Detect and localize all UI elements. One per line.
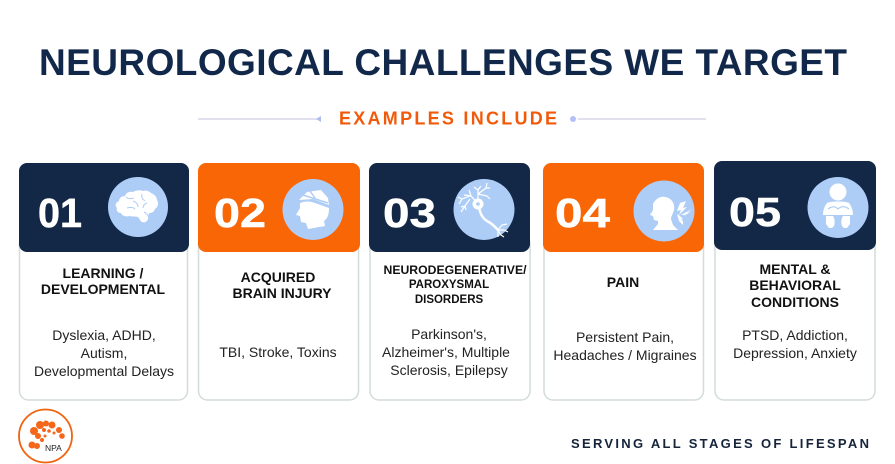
number 04: 04 <box>555 190 610 236</box>
heading: CONDITIONS <box>751 294 839 310</box>
heading: LEARNING / <box>63 265 144 281</box>
title: NEUROLOGICAL CHALLENGES WE TARGET <box>39 42 847 83</box>
heading: BEHAVIORAL <box>749 277 841 293</box>
number 01: 01 <box>38 190 82 236</box>
heading: DEVELOPMENTAL <box>41 281 166 297</box>
heading: NEURODEGENERATIVE/ <box>384 265 527 277</box>
icon: neuron <box>454 179 514 240</box>
heading: BRAIN INJURY <box>232 285 332 301</box>
body text: TBI, Stroke, Toxins <box>219 344 337 360</box>
logo: NPA <box>19 410 72 462</box>
icon: person hugging knees <box>808 177 868 238</box>
body text: PTSD, Addiction, <box>742 327 848 343</box>
body text: Dyslexia, ADHD, <box>52 327 156 343</box>
panel: card 1 learning / developmental <box>19 163 189 400</box>
subtitle with divider lines: EXAMPLES INCLUDE <box>339 108 557 128</box>
logo: NPA: NPA <box>45 443 62 453</box>
icon: brain <box>108 177 168 237</box>
body text: Developmental Delays <box>34 363 174 379</box>
body text: Autism, <box>81 345 127 361</box>
subtitle with divider lines <box>198 108 706 128</box>
body text: Headaches / Migraines <box>553 347 697 363</box>
body text: Parkinson's, <box>411 326 487 342</box>
heading: PAIN <box>607 274 639 290</box>
number 03: 03 <box>383 190 436 236</box>
panel: card 3 neurodegenerative <box>369 163 530 400</box>
body text: Persistent Pain, <box>576 329 674 345</box>
body text: Depression, Anxiety <box>733 345 857 361</box>
panel: card 5 mental and behavioral <box>714 161 876 400</box>
body text: Sclerosis, Epilepsy <box>390 362 508 378</box>
number 02: 02 <box>214 190 266 236</box>
body text: Alzheimer's, Multiple <box>382 344 510 360</box>
icon: bandaged head <box>282 179 344 240</box>
number 05: 05 <box>729 189 781 235</box>
icon: head with pain <box>634 180 694 242</box>
panel: card 2 acquired brain injury <box>198 163 360 400</box>
heading: MENTAL & <box>759 261 831 277</box>
heading: DISORDERS <box>415 294 484 306</box>
heading: PAROXYSMAL <box>409 279 489 291</box>
panel: card 4 pain <box>543 163 704 400</box>
heading: ACQUIRED <box>241 269 315 285</box>
footer tagline: SERVING ALL STAGES OF LIFESPAN <box>571 436 869 451</box>
